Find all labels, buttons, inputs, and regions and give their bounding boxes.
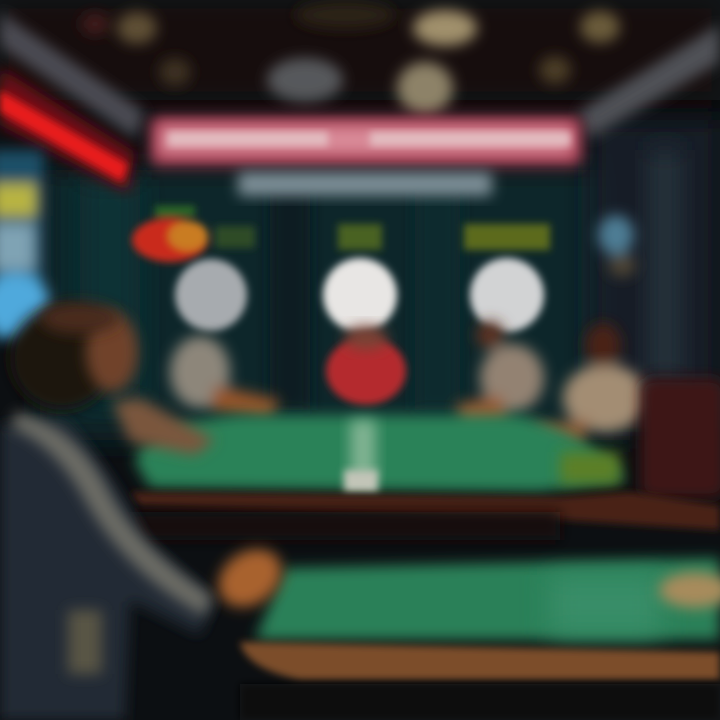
subtitle banner [238, 172, 492, 196]
figure far right [530, 323, 647, 450]
white circle left [175, 259, 247, 331]
red neon sign [0, 68, 135, 192]
lower poker table [240, 558, 720, 720]
ceiling lights [81, 1, 620, 114]
white circle right [470, 258, 544, 332]
figure right [455, 321, 544, 432]
seated hands left of table [112, 398, 215, 455]
ceiling beam left [0, 12, 145, 138]
green label right [464, 224, 550, 250]
green label centre [338, 224, 382, 250]
figure left [170, 336, 280, 420]
colour chart icon at left [132, 206, 255, 262]
red chair right [640, 378, 720, 498]
right wall blue light [598, 215, 636, 277]
foreground man [0, 302, 293, 720]
figure centre red [326, 326, 406, 405]
title banner: pink-white heading [150, 116, 582, 166]
white circle centre [323, 258, 397, 332]
ceiling beam right [578, 24, 720, 138]
upper poker table [130, 415, 720, 540]
left wall sign [0, 150, 50, 340]
